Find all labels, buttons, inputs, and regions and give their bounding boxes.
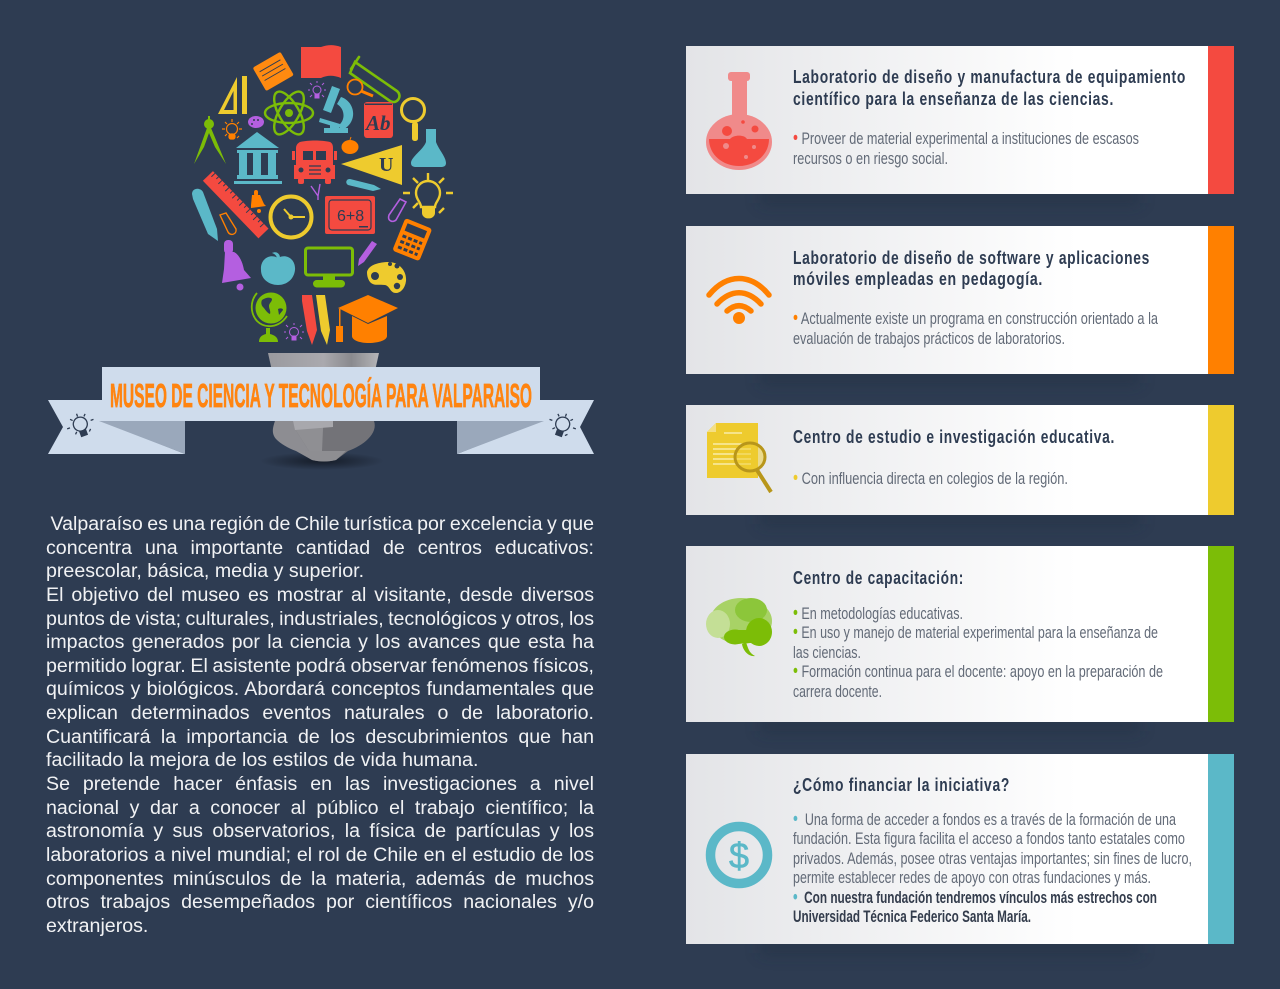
- icon: cyan flask: [411, 129, 446, 167]
- text block: [793, 128, 1139, 168]
- heading: Centro de estudio e investigación educativa.: [793, 427, 1115, 447]
- icon: orange calculator: [392, 218, 432, 261]
- ribbon right tail: [457, 400, 594, 454]
- icon: cyan microscope: [319, 86, 353, 133]
- intro text block: impactos generados por la ciencia y los avances que esta ha: [46, 631, 594, 653]
- intro text block: componentes minúsculos de la materia, además de muchos: [46, 868, 594, 890]
- intro text block: explican determinados eventos naturales o de laboratorio.: [46, 702, 594, 724]
- text block: • En uso y manejo de material experimental para la enseñanza de: [793, 622, 1158, 643]
- icon: small orange bulb: [222, 119, 242, 139]
- icon: cyan apple: [261, 252, 295, 285]
- intro text block: concentra una importante cantidad de centros educativos:: [46, 537, 594, 559]
- ribbon main band: [102, 367, 540, 421]
- icon: cyan pen horizontal: [346, 179, 381, 191]
- icon: red book Ab: Ab: [364, 111, 391, 135]
- icon: yellow pennant: [341, 145, 402, 185]
- text block: [793, 603, 1163, 701]
- icon: green test tube: [350, 57, 399, 102]
- panel: laboratorio de software: [686, 226, 1234, 374]
- icon: purple test tube: [389, 199, 406, 221]
- heading: ¿Cómo financiar la iniciativa?: [793, 775, 1010, 795]
- icon: red and yellow pens: [302, 295, 330, 345]
- icon: brain: [706, 598, 772, 656]
- icon: wifi: [709, 278, 769, 324]
- icon: small purple compass: [311, 184, 320, 200]
- icon: red blackboard: [325, 196, 375, 234]
- icon: green compass: [194, 116, 226, 164]
- text block: • Proveer de material experimental a instituciones de escasos: [793, 128, 1139, 149]
- text block: permite establecer redes de apoyo con otras fundaciones y más.: [793, 868, 1151, 887]
- icon: small orange test tube: [220, 213, 236, 234]
- icon: green atom: [265, 87, 313, 139]
- icon: purple bell: [222, 240, 251, 290]
- text block: recursos o en riesgo social.: [793, 149, 948, 168]
- heading: móviles empleadas en pedagogía.: [793, 269, 1043, 289]
- icon: cyan pen diagonal: [192, 189, 218, 241]
- icon: small purple palette: [248, 116, 264, 128]
- icon: orange notepad: [253, 52, 294, 91]
- intro text block: otros trabajos desempeñados por científicos nacionales y/o: [46, 891, 594, 913]
- heading: [793, 67, 1186, 109]
- panel: centro de capacitacion: [686, 546, 1234, 722]
- icon: red blackboard: 6+8: [337, 208, 364, 225]
- intro text block: astronomía y sus observatorios, la física de partículas y los: [46, 820, 594, 842]
- icon: yellow pennant: U: [379, 154, 393, 176]
- heading: Laboratorio de diseño de software y aplicaciones: [793, 248, 1150, 268]
- text block: [793, 809, 1192, 887]
- panel: laboratorio de equipamiento: [686, 46, 1234, 194]
- icon: red book Ab: [364, 102, 393, 138]
- text block: carrera docente.: [793, 682, 882, 701]
- icon: flask: [706, 72, 772, 170]
- icon: orange magnifier: [348, 80, 373, 96]
- intro text block: Valparaíso es una región de Chile turística por excelencia y que: [50, 513, 594, 535]
- icon: yellow clock: [270, 196, 312, 238]
- intro text block: químicos y biológicos. Abordará conceptos fundamentales que: [46, 678, 594, 700]
- text block: • Actualmente existe un programa en construcción orientado a la: [793, 308, 1158, 329]
- bold closing text: [793, 887, 1157, 926]
- text block: • Formación continua para el docente: apoyo en la preparación de: [793, 661, 1163, 682]
- ribbon left tail: [48, 400, 185, 454]
- icon: small purple bulb bottom: [284, 323, 304, 340]
- ribbon banner: MUSEO DE CIENCIA Y TECNOLOGÍA PARA VALPARAISO: [110, 377, 532, 414]
- icon: dollar coin: [710, 826, 768, 884]
- intro text block: facilitado la mejora de los estilos de vida humana.: [46, 749, 478, 771]
- intro text block: Se pretende hacer énfasis en las investigaciones a nivel: [46, 773, 594, 795]
- icon: orange apple: [342, 137, 358, 154]
- text block: las ciencias.: [793, 643, 861, 662]
- text block: [793, 308, 1158, 348]
- icon: purple pen small: [358, 241, 377, 266]
- heading: [793, 248, 1150, 289]
- icon: document with magnifier: [707, 423, 771, 492]
- intro text block: laboratorios a nivel mundial; el rol de Chile en el estudio de los: [46, 844, 594, 866]
- icon: yellow palette: [367, 262, 406, 293]
- icon: red school bus: [292, 140, 337, 184]
- heading: Centro de capacitación:: [793, 568, 964, 588]
- icon: cyan museum building: [234, 132, 282, 184]
- panel: como financiar: [686, 754, 1234, 944]
- icon: green globe: [252, 292, 287, 342]
- intro text block: Cuantificará la importancia de los descubrimientos que han: [46, 726, 594, 748]
- text block: • En metodologías educativas.: [793, 603, 963, 624]
- panel: centro de estudio: [686, 405, 1234, 515]
- intro text block: preescolar, básica, media y superior.: [46, 560, 364, 582]
- intro text block: El objetivo del museo es mostrar al visitante, desde diversos: [46, 584, 594, 606]
- intro text block: permitido lograr. El asistente podrá observar fenómenos físicos,: [46, 655, 594, 677]
- text block: evaluación de trabajos prácticos de laboratorios.: [793, 329, 1065, 348]
- intro text block: puntos de vista; culturales, industriales, tecnológicos y otros, los: [46, 608, 594, 630]
- icon: small purple bulb: [308, 81, 326, 98]
- icon: red open book: [301, 45, 341, 78]
- bold closing text: Universidad Técnica Federico Santa María.: [793, 907, 1031, 926]
- icon: small orange bell: [251, 190, 266, 213]
- intro text block: extranjeros.: [46, 915, 148, 937]
- heading: científico para la enseñanza de las ciencias.: [793, 89, 1114, 109]
- icon: ribbon left bulb: [63, 409, 98, 440]
- icon: orange graduation cap: [336, 295, 398, 343]
- icon: red ruler: [203, 171, 269, 238]
- icon: yellow bulb: [403, 173, 453, 218]
- bulb base: [260, 353, 384, 470]
- icon: ribbon right bulb: [545, 409, 580, 440]
- icon: green monitor: [306, 248, 352, 288]
- intro text block: [46, 513, 594, 937]
- icon: yellow magnifier: [402, 98, 424, 141]
- icon: dollar coin: $: [729, 835, 749, 876]
- ribbon banner: [48, 367, 594, 454]
- intro text block: nacional y dar a conocer al público el trabajo científico; la: [46, 797, 594, 819]
- text block: • Con influencia directa en colegios de la región.: [793, 468, 1068, 489]
- icon: yellow set square and ruler: [218, 76, 247, 114]
- panel shadows: [760, 190, 1140, 954]
